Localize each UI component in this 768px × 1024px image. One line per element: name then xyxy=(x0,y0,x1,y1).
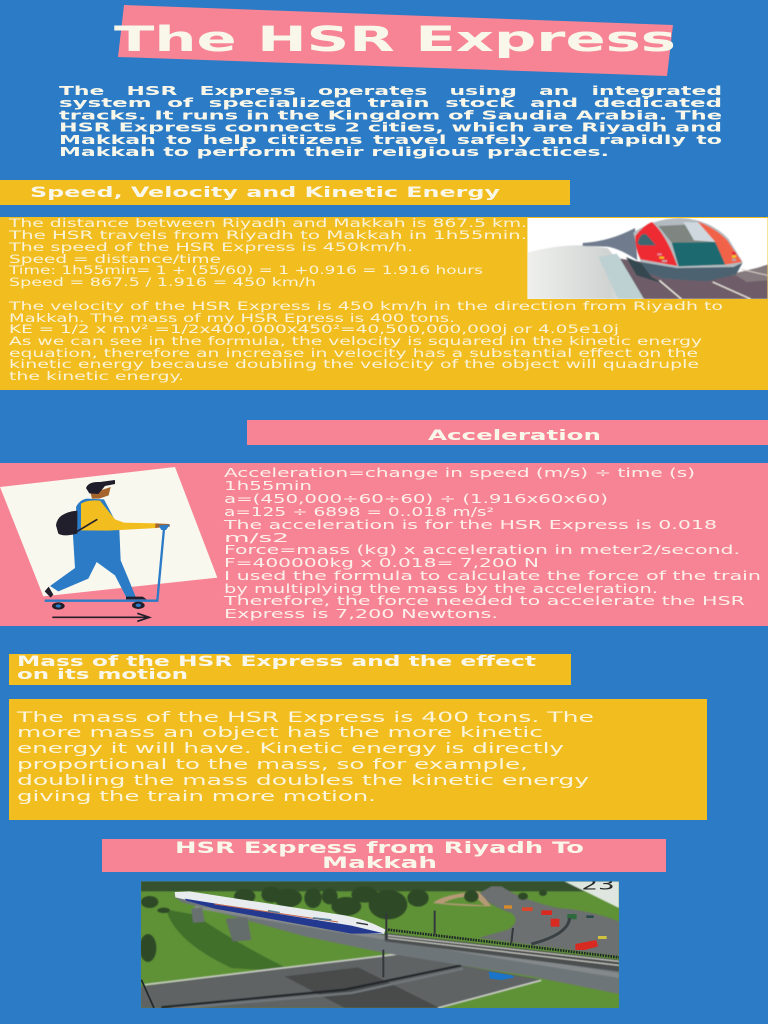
heading: mass and motion xyxy=(9,654,571,685)
text block: velocity and kinetic energy xyxy=(7,299,723,383)
panel: speed and kinetic energy xyxy=(0,216,768,390)
road traffic xyxy=(489,905,607,980)
intro paragraph: Makkah to help citizens travel safely and rapidly to xyxy=(59,133,722,147)
text block: velocity and kinetic energy: equation, therefore an increase in velocity has a substantial effect on the xyxy=(9,346,698,360)
heading: route: Makkah xyxy=(322,853,437,872)
text block: acceleration and force: Force=mass (kg) x acceleration in meter2/second. xyxy=(224,543,740,557)
text block: acceleration and force: F=400000kg x 0.018= 7,200 N xyxy=(224,556,539,570)
text block: acceleration and force: by multiplying the mass by the acceleration. xyxy=(224,582,658,596)
high speed train xyxy=(175,891,385,934)
scene label: 23 xyxy=(581,877,615,893)
text block: velocity and kinetic energy: Makkah. The mass of my HSR Epress is 400 tons. xyxy=(9,311,455,325)
heading: speed, velocity and kinetic energy xyxy=(0,180,570,205)
panel: mass effect: doubling the mass doubles the kinetic energy xyxy=(17,773,589,789)
text block: acceleration and force: Express is 7,200 Newtons. xyxy=(224,607,498,621)
text block: acceleration and force: 1h55min xyxy=(224,479,312,493)
panel: acceleration xyxy=(0,463,768,626)
text block: velocity and kinetic energy: kinetic energy because doubling the velocity of the object will quadruple xyxy=(9,357,699,371)
illustration: train on elevated railway xyxy=(140,877,619,1009)
text block: velocity and kinetic energy: the kinetic energy. xyxy=(9,369,184,383)
heading: mass and motion: on its motion xyxy=(17,667,188,683)
heading: route xyxy=(102,838,666,872)
text block: acceleration and force: a=125 ÷ 6898 = 0..018 m/s² xyxy=(224,505,494,519)
text block: speed calculation: Time: 1h55min= 1 + (55/60) = 1 +0.916 = 1.916 hours xyxy=(8,263,483,277)
text block: speed calculation: The HSR travels from Riyadh to Makkah in 1h55min. xyxy=(7,228,527,242)
heading: acceleration: Acceleration xyxy=(428,428,601,444)
panel: mass effect: giving the train more motion. xyxy=(17,789,376,805)
title: The HSR Express xyxy=(114,20,676,60)
panel: mass effect: energy it will have. Kinetic energy is directly xyxy=(17,741,564,757)
text block: speed calculation xyxy=(7,216,527,289)
illustration: person riding scooter xyxy=(0,467,217,621)
text block: acceleration and force: I used the formula to calculate the force of the train xyxy=(224,569,761,583)
text block: velocity and kinetic energy: The velocity of the HSR Express is 450 km/h in the direction from Riyadh to xyxy=(7,299,723,313)
text block: acceleration and force: Therefore, the force needed to accelerate the HSR xyxy=(222,594,745,608)
text block: speed calculation: Speed = distance/time xyxy=(9,252,221,266)
heading: route: HSR Express from Riyadh To xyxy=(175,838,584,857)
intro paragraph: Makkah to perform their religious practices. xyxy=(59,145,609,159)
text block: acceleration and force: Acceleration=change in speed (m/s) ÷ time (s) xyxy=(224,466,695,480)
text block: acceleration and force xyxy=(222,466,761,621)
heading: mass and motion: Mass of the HSR Express and the effect xyxy=(17,654,536,670)
panel: mass effect: proportional to the mass, so for example, xyxy=(17,757,528,773)
text block: speed calculation: Speed = 867.5 / 1.916 = 450 km/h xyxy=(9,275,316,289)
text block: acceleration and force: a=(450,000÷60÷60) ÷ (1.916x60x60) xyxy=(224,492,608,506)
intro paragraph: The HSR Express operates using an integrated xyxy=(59,84,722,98)
panel: mass effect xyxy=(9,699,707,820)
text block: velocity and kinetic energy: As we can see in the formula, the velocity is squared in the kinetic energy xyxy=(9,334,702,348)
intro paragraph: tracks. It runs in the Kingdom of Saudia Arabia. The xyxy=(59,108,722,122)
heading: speed, velocity and kinetic energy: Speed, Velocity and Kinetic Energy xyxy=(30,185,501,201)
text block: velocity and kinetic energy: KE = 1/2 x mv² =1/2x400,000x450²=40,500,000,000j or 4.05e10j xyxy=(9,322,619,336)
intro paragraph: HSR Express connects 2 cities, which are Riyadh and xyxy=(59,121,722,135)
intro paragraph: system of specialized train stock and dedicated xyxy=(59,96,722,110)
panel: mass effect: The mass of the HSR Express is 400 tons. The xyxy=(15,710,594,726)
text block: acceleration and force: The acceleration is for the HSR Express is 0.018 xyxy=(222,518,717,532)
heading: acceleration xyxy=(247,420,768,445)
panel: mass effect: more mass an object has the more kinetic xyxy=(17,725,543,741)
text block: speed calculation: The speed of the HSR Express is 450km/h. xyxy=(7,240,413,254)
title banner xyxy=(114,5,676,76)
text block: speed calculation: The distance between Riyadh and Makkah is 867.5 km. xyxy=(7,216,527,230)
intro paragraph xyxy=(59,84,722,159)
illustration: front of high speed train xyxy=(527,218,768,299)
text block: acceleration and force: m/s2 xyxy=(224,531,289,545)
